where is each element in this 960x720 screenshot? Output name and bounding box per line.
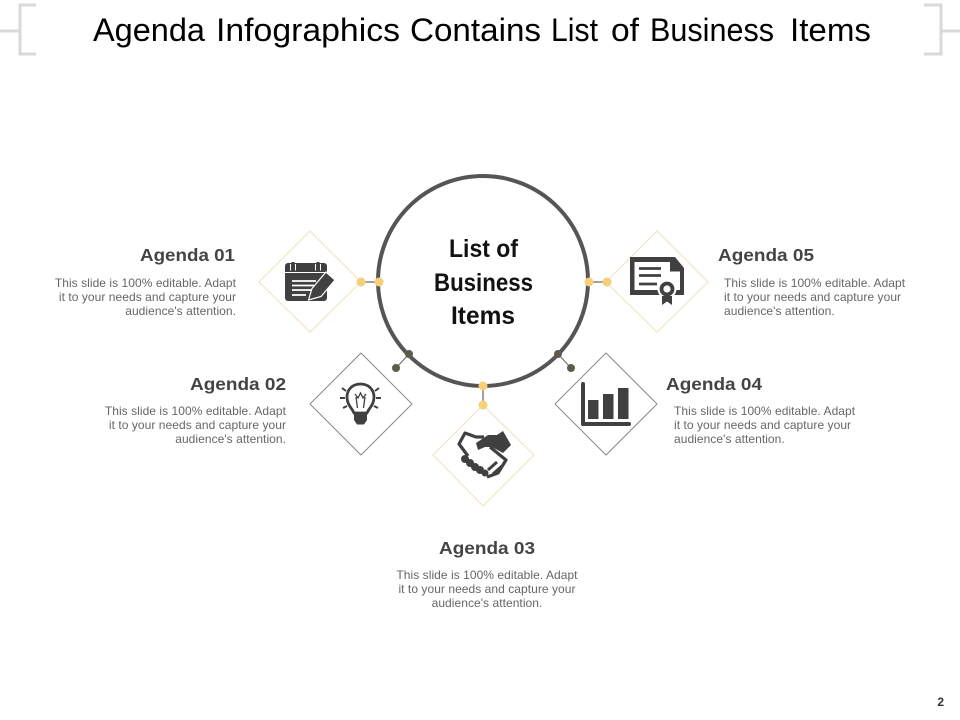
text block: agenda 04: This slide is 100% editable. Adapt xyxy=(674,404,856,418)
central label: Items xyxy=(451,302,515,330)
title: Infographics xyxy=(216,12,400,48)
text block: agenda 03: Agenda 03 xyxy=(439,538,535,558)
text block: agenda 05 xyxy=(718,245,906,318)
title: Items xyxy=(790,12,871,48)
text block: agenda 04: audience's attention. xyxy=(674,432,785,446)
text block: agenda 04: it to your needs and capture your xyxy=(674,418,851,432)
diamond: agenda 05 xyxy=(606,231,708,332)
icon: light bulb xyxy=(340,384,381,424)
text block: agenda 05: This slide is 100% editable. Adapt xyxy=(724,276,906,290)
text block: agenda 01: Agenda 01 xyxy=(140,245,235,265)
text block: agenda 01 xyxy=(55,245,237,318)
text block: agenda 03: it to your needs and capture your xyxy=(398,582,576,596)
text block: agenda 04 xyxy=(666,374,856,446)
connector: agenda 02 xyxy=(392,350,413,372)
text block: agenda 02: Agenda 02 xyxy=(190,374,286,394)
title: Agenda xyxy=(93,12,205,48)
left title bracket xyxy=(0,5,36,54)
text block: agenda 01: audience's attention. xyxy=(125,304,236,318)
central label: List of xyxy=(449,235,519,263)
text block: agenda 02: audience's attention. xyxy=(175,432,286,446)
diamond: agenda 02 xyxy=(310,353,412,455)
text block: agenda 02: This slide is 100% editable. Adapt xyxy=(105,404,287,418)
title xyxy=(93,12,871,48)
icon: bar chart xyxy=(581,382,631,426)
text block: agenda 05: Agenda 05 xyxy=(718,245,814,265)
text block: agenda 05: it to your needs and capture your xyxy=(724,290,901,304)
connector: agenda 01 xyxy=(356,278,384,286)
title: List xyxy=(551,12,598,48)
connector: agenda 05 xyxy=(584,278,612,286)
text block: agenda 02 xyxy=(105,374,287,446)
icon: handshake xyxy=(459,431,511,477)
text block: agenda 03: This slide is 100% editable. Adapt xyxy=(396,568,578,582)
icon: calendar with pencil xyxy=(285,262,335,301)
central circle xyxy=(378,176,588,386)
connector: agenda 03 xyxy=(478,382,488,410)
text block: agenda 02: it to your needs and capture your xyxy=(109,418,286,432)
title: Contains xyxy=(410,12,541,48)
right title bracket xyxy=(924,5,960,54)
title: of xyxy=(611,12,639,48)
diamond: agenda 01 xyxy=(259,231,361,332)
icon: certificate xyxy=(630,257,684,305)
text block: agenda 05: audience's attention. xyxy=(724,304,835,318)
text block: agenda 01: it to your needs and capture your xyxy=(59,290,236,304)
text block: agenda 03 xyxy=(396,538,578,610)
title: Business xyxy=(650,12,774,48)
diamond: agenda 04 xyxy=(555,353,657,455)
central label: Business xyxy=(434,269,533,297)
text block: agenda 03: audience's attention. xyxy=(432,596,542,610)
diamond: agenda 03 xyxy=(433,405,534,506)
connector: agenda 04 xyxy=(554,350,575,372)
page number: 2 xyxy=(937,695,944,709)
text block: agenda 04: Agenda 04 xyxy=(666,374,762,394)
text block: agenda 01: This slide is 100% editable. Adapt xyxy=(55,276,237,290)
central label xyxy=(434,235,533,330)
